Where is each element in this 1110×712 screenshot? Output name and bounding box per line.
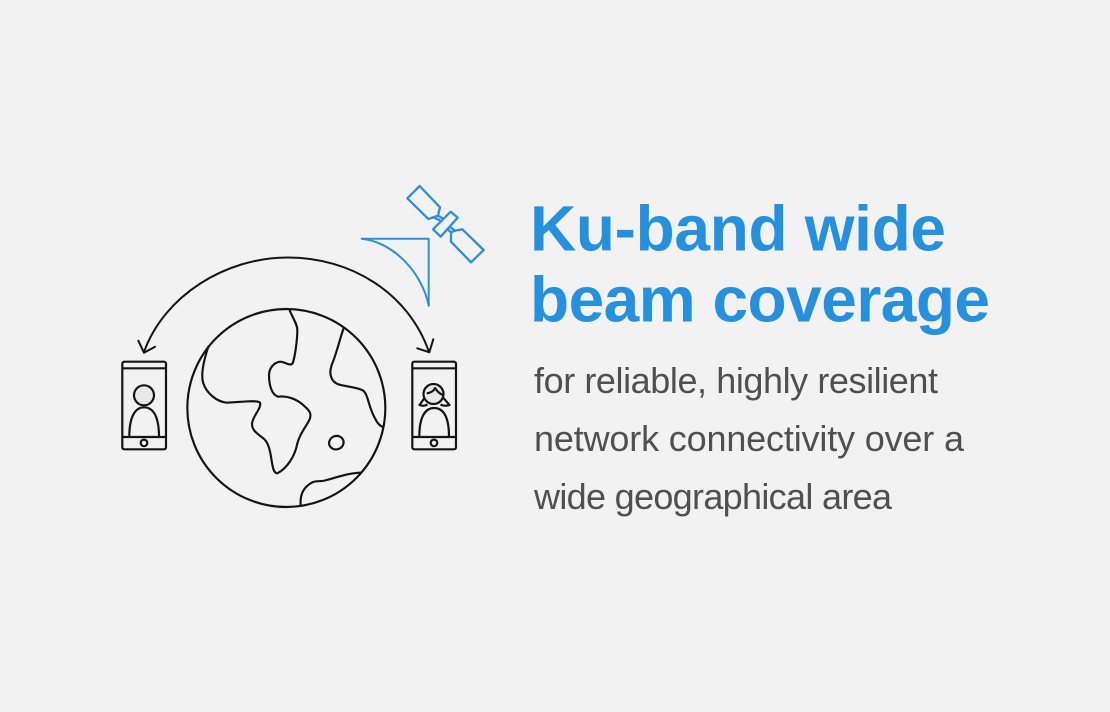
icon: phone with woman	[412, 362, 456, 449]
description text: for reliable, highly resilient	[534, 360, 938, 401]
icon: signal beam	[362, 239, 429, 306]
description text: wide geographical area	[533, 476, 893, 517]
icon: globe	[187, 309, 385, 507]
heading: beam coverage	[530, 264, 990, 336]
icon: satellite	[407, 186, 484, 262]
heading	[530, 192, 990, 336]
description text	[533, 360, 965, 517]
heading: Ku-band wide	[530, 192, 946, 264]
icon: phone with man	[122, 362, 166, 449]
arrow: curved double-headed link between phones	[138, 258, 433, 353]
description text: network connectivity over a	[534, 418, 965, 459]
